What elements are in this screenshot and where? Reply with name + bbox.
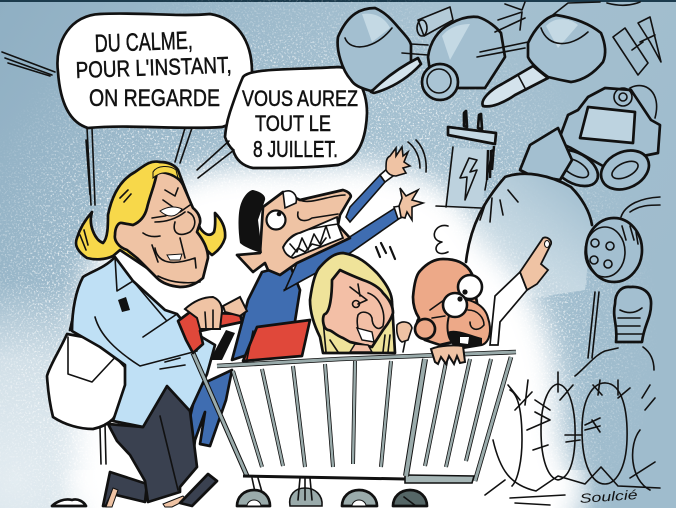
- fist: [397, 322, 412, 342]
- character: Bardella torso: [232, 265, 303, 360]
- cart side frame: [193, 353, 247, 476]
- bullet one: [371, 58, 421, 93]
- Le Pen dropped object at bottom left: [52, 499, 86, 506]
- weapons: helmet with ring: [402, 17, 528, 100]
- small weapons debris: [417, 2, 640, 36]
- bubble text: Bardella: 8 JUILLET.: [253, 136, 338, 162]
- gas mask: [546, 86, 660, 197]
- bubble text: Bardella: VOUS AUREZ: [242, 86, 358, 111]
- character: Bardella raised arms: [285, 147, 423, 290]
- weapons: left boxing glove: [338, 8, 421, 93]
- pointing arm: [490, 272, 527, 345]
- hand: upper: [386, 147, 410, 176]
- speech bubble: Bardella: [197, 67, 367, 178]
- motion lines: [2, 52, 95, 205]
- Le Pen hand on handle: [185, 297, 222, 329]
- cart rails: [217, 352, 516, 366]
- character: Bardella head: [237, 190, 351, 275]
- bubble text: Bardella: TOUT LE: [255, 111, 331, 136]
- cart wire bars: [233, 359, 491, 476]
- character: Le Pen trousers and foot: [103, 386, 217, 507]
- barbed wire: [485, 372, 660, 505]
- hand: lower: [399, 188, 423, 220]
- icon: electric plug battery: [436, 111, 496, 208]
- signature: Soulcié: [579, 487, 638, 506]
- character: Le Pen bag: [47, 267, 128, 464]
- red cart handle: [178, 312, 242, 353]
- bubble text: Le Pen: POUR L'INSTANT,: [75, 52, 232, 83]
- character: Le Pen hair: [76, 162, 225, 270]
- Meloni hand at chin: [350, 344, 372, 352]
- shoe: [180, 474, 217, 506]
- bomb dome: [466, 128, 592, 300]
- bubble text: Le Pen: [75, 27, 232, 112]
- red folder: [243, 320, 310, 361]
- bubble text: Bardella: [242, 86, 358, 162]
- small motion marks: [376, 140, 448, 259]
- speech bubble: Le Pen: [57, 14, 252, 163]
- electric connector with cables: [585, 197, 660, 282]
- Michel hand on rail: [431, 345, 465, 364]
- bullet two: [482, 66, 548, 106]
- shell with mound: [575, 287, 654, 376]
- weapons: right boxing glove: [482, 15, 605, 106]
- character: Meloni: [310, 253, 412, 353]
- cart undercarriage: [290, 488, 322, 506]
- character: Le Pen shirt and arm: [72, 257, 215, 427]
- face: [447, 300, 490, 345]
- character: Bardella legs behind cart: [170, 370, 232, 457]
- bubble text: Le Pen: ON REGARDE: [89, 85, 220, 112]
- character: Michel: [413, 237, 551, 350]
- bubble text: Le Pen: DU CALME,: [94, 27, 193, 58]
- bald head: [413, 259, 480, 345]
- shopping cart: [178, 297, 516, 506]
- Bardella hand on handle: [223, 297, 247, 316]
- character: Le Pen face: [115, 166, 208, 287]
- Meloni nose, brows and mouth: [350, 284, 384, 330]
- wheels: [237, 490, 427, 506]
- shell casings: [613, 17, 661, 75]
